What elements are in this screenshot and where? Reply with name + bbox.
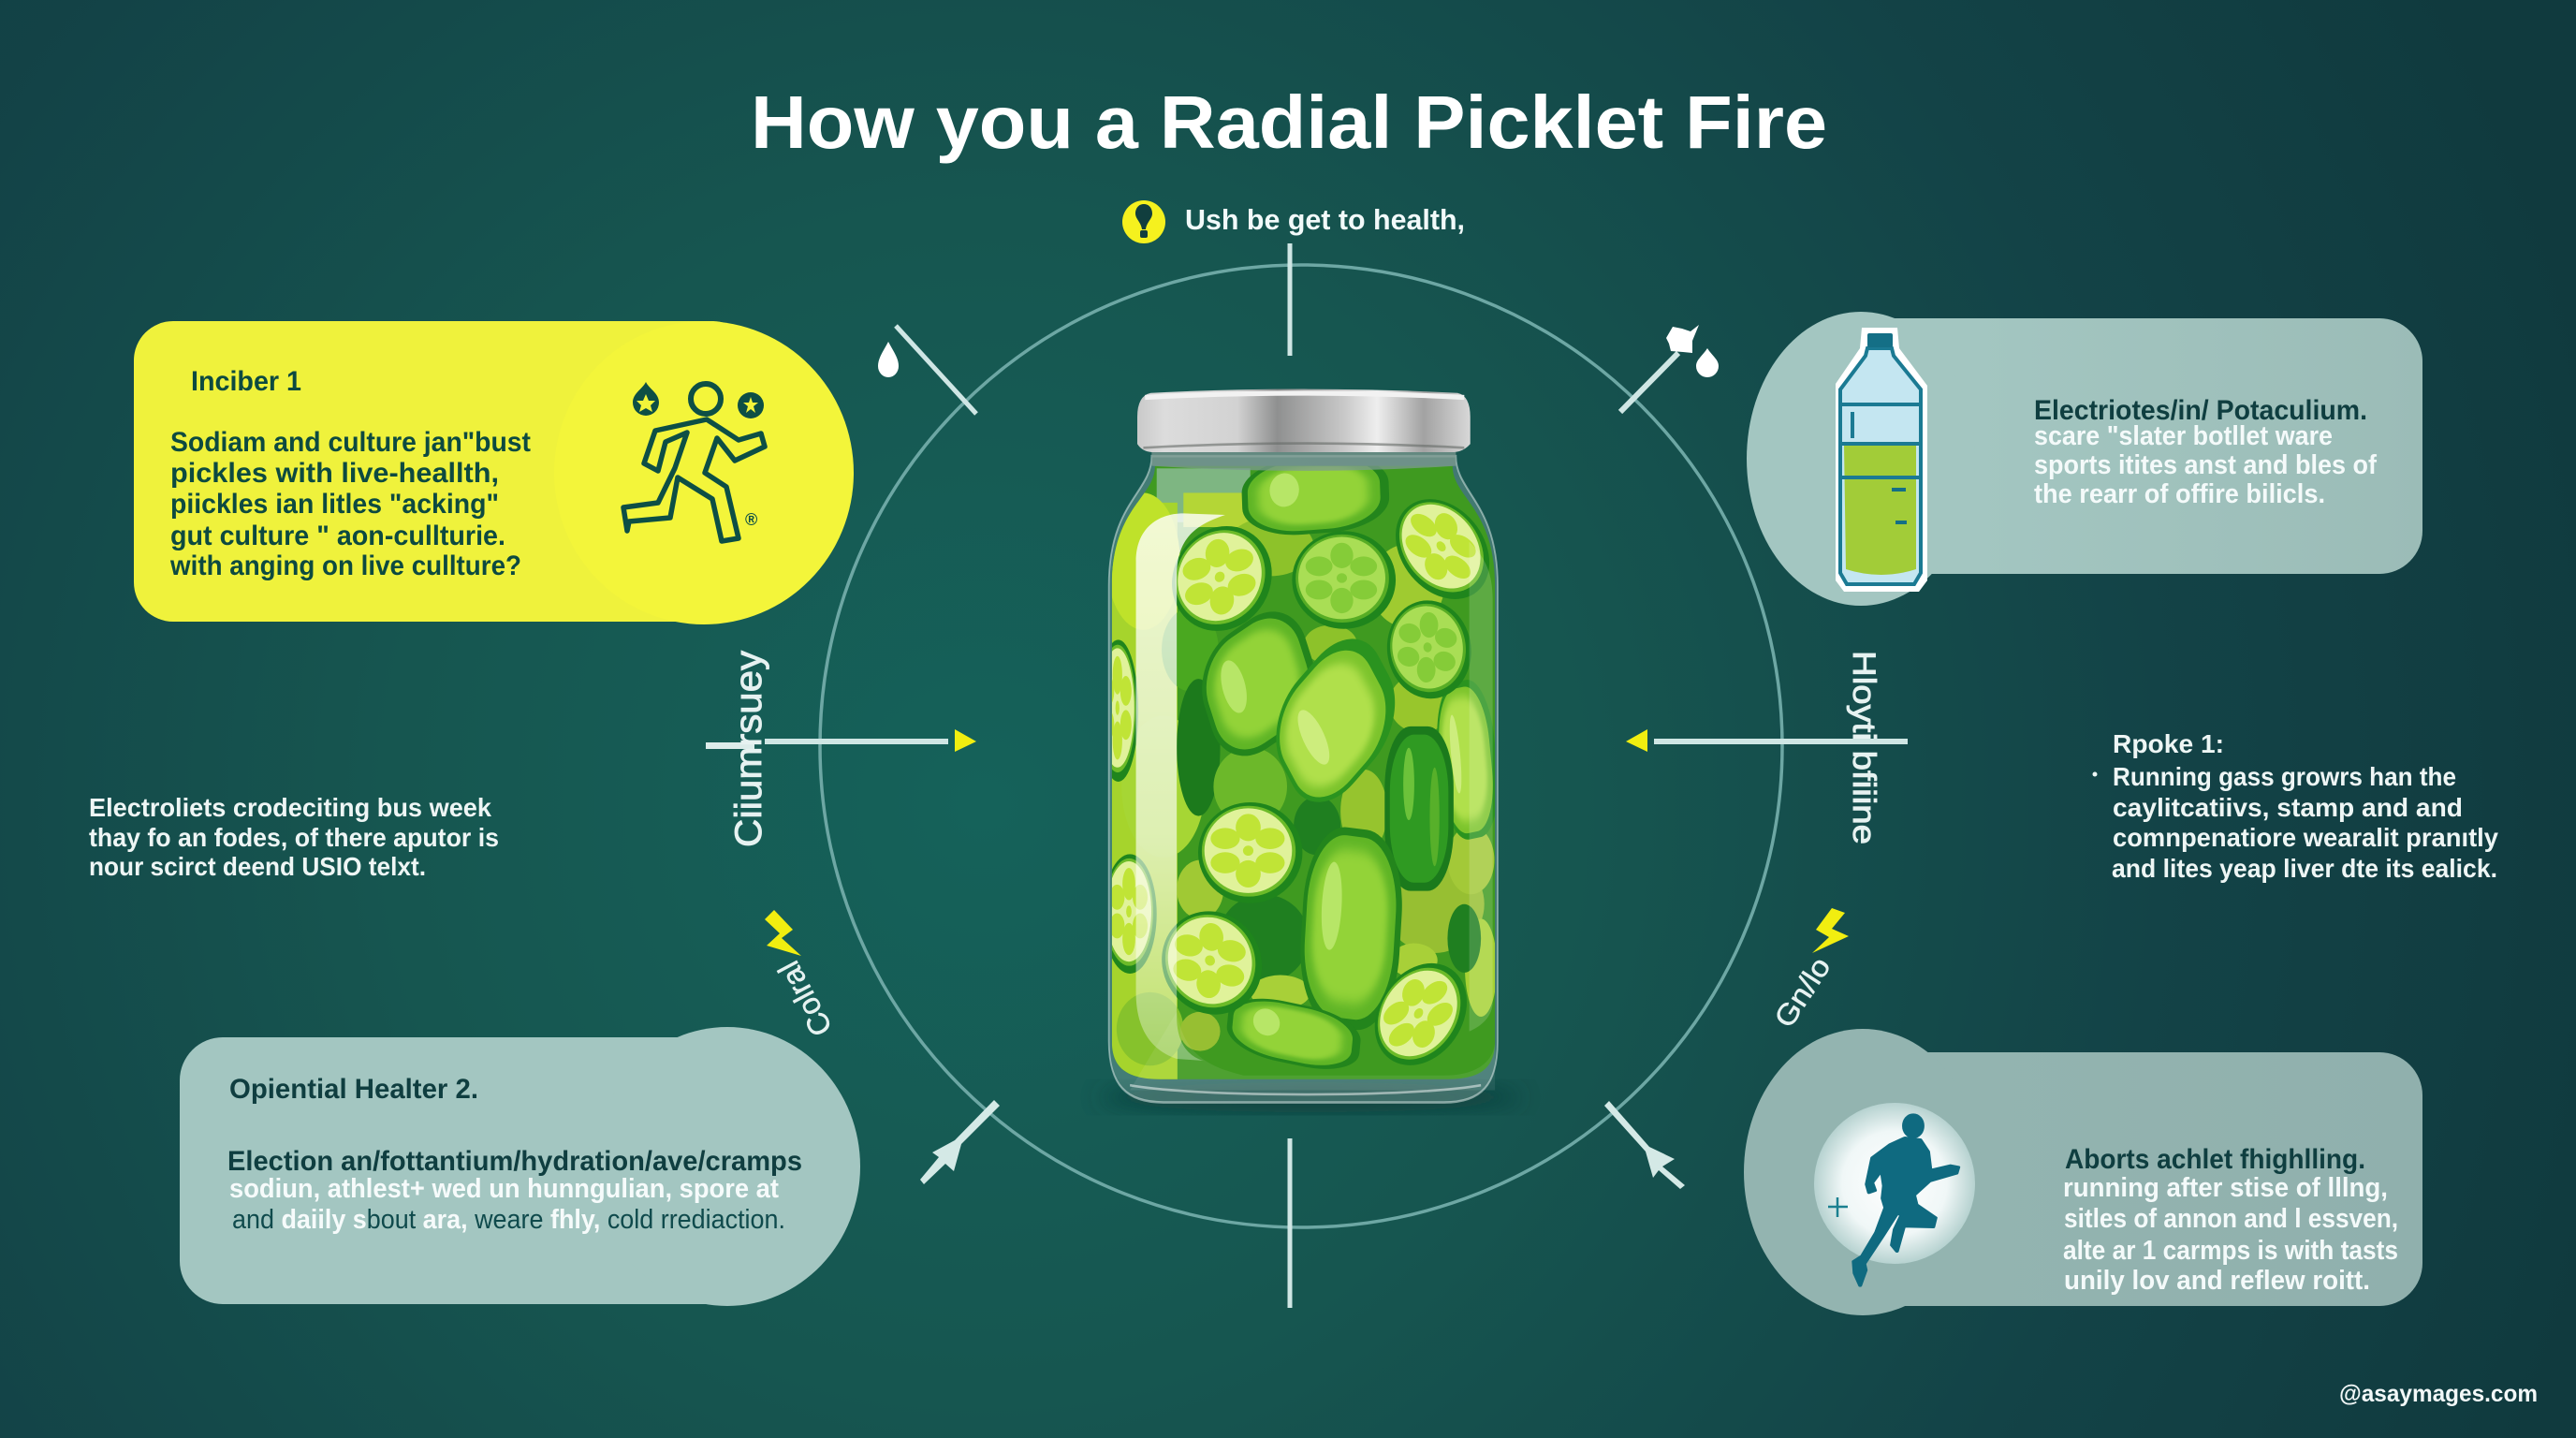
pickle: dark right <box>1384 726 1454 891</box>
panel: yellow top-left <box>134 321 854 624</box>
body text: alte ar 1 carmps is with tasts <box>2063 1236 2398 1266</box>
panel: bottom-left <box>180 1027 860 1306</box>
text block: right <box>2093 729 2498 883</box>
icon: yellow bulb <box>1122 200 1165 243</box>
arrow: left spoke <box>706 729 976 752</box>
pickle: large center-right <box>1277 638 1395 802</box>
heading: Aborts achlet fhighlling. <box>2065 1144 2365 1175</box>
body text: Election an/fottantium/hydration/ave/cramps <box>227 1146 802 1177</box>
jar shadow <box>1100 1082 1521 1112</box>
watermark: @asaymages.com <box>2339 1381 2538 1407</box>
icon: bottle <box>1836 328 1927 592</box>
text block: right: Rpoke 1: <box>2113 729 2224 758</box>
pickle: right edge <box>1437 680 1495 840</box>
arrow: bottom-left <box>920 1100 1000 1184</box>
body text: sports itites anst and bles of <box>2034 450 2377 480</box>
body text <box>2034 421 2377 509</box>
heading: Electriotes/in/ Potaculium. <box>2034 395 2367 426</box>
text block: right: and lites yeap liver dte its ealick. <box>2112 854 2497 883</box>
body text: sitles of annon and l essven, <box>2064 1204 2398 1234</box>
body text: gut culture " aon-cullturie. <box>170 521 505 551</box>
panel: bottom-left: sodiun, athlest+ wed un hunngulian, spore at <box>229 1174 779 1204</box>
pickle: large center-left <box>1202 612 1313 756</box>
pickles <box>1098 451 1503 1083</box>
body text: with anging on live cullture? <box>169 550 521 581</box>
body text: the rearr of offire bilicls. <box>2034 479 2325 509</box>
body text: running after stise of lllng, <box>2063 1173 2388 1203</box>
text block: right: caylitcatiivs, stamp and and <box>2113 793 2463 822</box>
text block: left: nour scirct deend USIO telxt. <box>89 852 426 881</box>
curved label left: Colral <box>771 956 839 1042</box>
text block: right: comnpenatiore wearalit pranıtly <box>2113 823 2498 852</box>
body text: unily lov and reflew roitt. <box>2064 1266 2370 1296</box>
spoke: top-left with water drop <box>878 326 976 414</box>
glass highlight <box>1136 513 1225 1061</box>
arrow: right spoke <box>1626 729 1908 752</box>
text block: left: Electroliets crodeciting bus week <box>89 793 491 822</box>
radial ring <box>820 265 1782 1227</box>
panel: bottle top-right <box>1747 312 2422 606</box>
slices <box>1172 526 1272 631</box>
vertical label right: Hloyti bfiiine <box>1846 651 1881 844</box>
icon: running figure <box>623 382 765 541</box>
icon: lightning left <box>765 910 801 956</box>
jar neck <box>1151 451 1456 471</box>
body text: Sodiam and culture jan"bust <box>170 427 531 458</box>
top label with bulb icon <box>1122 200 1465 243</box>
body text <box>169 427 531 581</box>
spoke: top-right with splat and drop <box>1620 325 1719 412</box>
body text <box>2063 1173 2398 1296</box>
icon: running figure: ® <box>745 510 757 529</box>
lid <box>1137 389 1471 452</box>
body text: piickles ian litles "acking" <box>170 489 499 520</box>
curved label right: Gn/lo <box>1768 951 1837 1034</box>
spoke: top <box>1288 243 1292 356</box>
text block: right: Running gass growrs han the <box>2113 762 2456 791</box>
heading: Opiential Healter 2. <box>229 1074 478 1105</box>
vertical label left: Ciiumrsuey <box>728 651 769 847</box>
text block: left: thay fo an fodes, of there aputor is <box>89 823 499 852</box>
heading: Inciber 1: Inciber 1 <box>191 366 301 397</box>
pickle: large lower <box>1301 828 1402 1030</box>
panel: bottom-left: and daiily sbout ara, weare fhly, cold rrediaction. <box>232 1205 785 1235</box>
arrow: bottom-right <box>1604 1101 1685 1189</box>
panel: bottom-right <box>1744 1029 2422 1315</box>
body text: scare "slater botllet ware <box>2034 421 2333 451</box>
pickle jar <box>1098 389 1503 1103</box>
text block: left <box>89 793 499 881</box>
top label text: Ush be get to health, <box>1185 203 1465 236</box>
jar glass body <box>1109 456 1498 1103</box>
body text: pickles with live-heallth, <box>170 458 499 489</box>
icon: runner in circle <box>1814 1103 1975 1285</box>
title: How you a Radial Picklet Fire <box>751 81 1827 164</box>
pickle: top long <box>1241 466 1389 536</box>
pickle: bottom long <box>1226 998 1361 1069</box>
icon: lightning right <box>1812 908 1849 953</box>
spoke: bottom <box>1288 1138 1292 1308</box>
